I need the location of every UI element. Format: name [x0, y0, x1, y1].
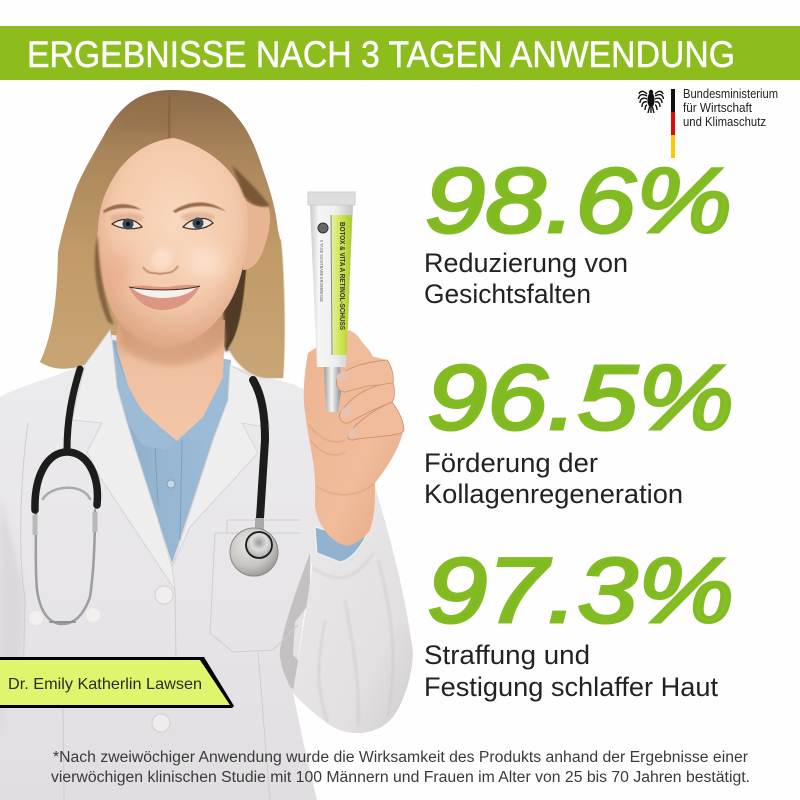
hair front right: [175, 92, 283, 287]
neck: [116, 320, 225, 441]
sleeve folds: [312, 553, 393, 725]
tube body: [310, 205, 353, 367]
value 97.3%: 97.3%: [427, 540, 734, 642]
tube label edge: [331, 215, 332, 355]
head: [96, 137, 248, 345]
title text: ERGEBNISSE NACH 3 TAGEN ANWENDUNG: [27, 33, 735, 75]
stethoscope black tubing: [67, 369, 80, 450]
nose: [143, 248, 178, 274]
tag fill: [0, 660, 230, 705]
smile: [129, 285, 200, 310]
name tag: [0, 657, 234, 708]
description: Straffung und: [424, 640, 590, 670]
eyes: [112, 218, 213, 230]
stat: collagen: [424, 347, 734, 509]
tube green label: [331, 215, 352, 355]
tube nozzle: [324, 366, 341, 412]
cheek highlight: [187, 247, 223, 277]
finger nails: [335, 369, 360, 440]
stethoscope silver arc: [43, 488, 90, 499]
ministry name: für Wirtschaft: [683, 100, 752, 115]
stat: wrinkles: [424, 150, 732, 309]
hair dark shadow behind neck: [222, 262, 248, 352]
hair crown shading: [116, 94, 173, 136]
face: [40, 90, 283, 364]
button: [152, 586, 173, 732]
stethoscope ear tips: [29, 608, 100, 625]
hair side dark near ear: [232, 165, 270, 207]
shirt collars: [112, 340, 231, 450]
stethoscope connector: [50, 621, 75, 623]
value 96.5%: 96.5%: [427, 347, 734, 449]
coat left arm shading: [0, 497, 25, 740]
description: Festigung schlaffer Haut: [424, 672, 718, 702]
value 98.6%: 98.6%: [425, 150, 732, 252]
description: [424, 640, 718, 702]
blue shirt: [112, 340, 231, 563]
description: [424, 448, 683, 509]
tag name: Dr. Emily Katherlin Lawsen: [8, 676, 202, 693]
ministry name: und Klimaschutz: [683, 114, 766, 129]
hair inner shadow left: [95, 235, 114, 325]
ministry name: [683, 86, 778, 129]
flag bar: [671, 89, 675, 158]
coat sleeve: [293, 487, 413, 733]
hair back: [40, 90, 284, 378]
description: Reduzierung von: [424, 248, 628, 278]
description: [424, 248, 628, 309]
icon: federal eagle: [638, 90, 664, 113]
hand fingers: [336, 331, 404, 440]
stethoscope fittings: [35, 512, 95, 535]
stethoscope fork: [35, 452, 97, 510]
eyebrows: [103, 202, 227, 213]
doctor illustration: [0, 90, 413, 800]
tag shadow: [0, 657, 234, 708]
coat lapels: [72, 330, 270, 590]
tube crimp: [308, 192, 355, 205]
ear: [243, 200, 270, 270]
tube small text: 5 TAGE SICHTBARE ERGEBNISSE: [319, 240, 324, 302]
stethoscope right tube: [253, 380, 265, 518]
eye shadows: [110, 212, 215, 223]
stat: firming: [424, 540, 734, 702]
neck shadow under chin: [120, 312, 226, 366]
tube seal: [318, 223, 328, 233]
footnote: *Nach zweiwöchiger Anwendung wurde die Wirksamkeit des Produkts anhand der Ergebnisse einer: [53, 749, 748, 766]
shirt placket: [155, 440, 182, 540]
hair parting: [169, 95, 170, 138]
cheek blush: [104, 250, 132, 290]
tube product name: BOTOX & VITA A RETINOL-SCHUSS: [338, 222, 345, 330]
palm creases: [309, 425, 374, 495]
hair front right strand: [228, 230, 285, 378]
stethoscope silver tubes: [36, 510, 95, 624]
product tube: [308, 192, 355, 412]
hand and wrist: [304, 330, 403, 546]
coat side shadow: [280, 553, 310, 692]
title banner: [0, 26, 800, 80]
chest piece: [230, 518, 278, 576]
ministry name: Bundesministerium: [683, 86, 778, 101]
footnote: [51, 749, 750, 786]
shirt cuff: [315, 520, 372, 562]
coat body: [0, 330, 317, 800]
description: Gesichtsfalten: [424, 279, 591, 309]
footnote: vierwöchigen klinischen Studie mit 100 Männern und Frauen im Alter von 25 bis 70 Jahren bestätigt.: [51, 769, 750, 786]
ministry logo: [638, 86, 778, 158]
stethoscope: [29, 369, 278, 625]
coat seams: [21, 423, 300, 800]
description: Kollagenregeneration: [424, 479, 683, 509]
description: Förderung der: [424, 448, 598, 478]
hair front left: [40, 90, 174, 364]
